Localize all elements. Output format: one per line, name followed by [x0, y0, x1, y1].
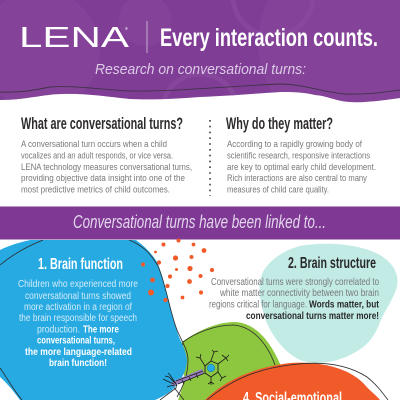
panel: why do they matter: [226, 114, 376, 196]
body text: vocalizes and an adult responds, or vice versa.: [21, 150, 173, 162]
logo: LENA: ®: [125, 26, 128, 31]
body text: most predictive metrics of child outcomes.: [21, 184, 170, 196]
blob: orange panel: [205, 363, 388, 400]
section band: [0, 206, 400, 240]
heading: 1. Brain function: [38, 256, 123, 273]
orange dots: [141, 238, 214, 302]
heading: What are conversational turns?: [21, 114, 183, 133]
body text: According to a rapidly growing body of: [227, 139, 362, 150]
bold takeaway: brain function!: [49, 358, 107, 369]
panel: what are conversational turns: [21, 114, 192, 196]
wavy line: [0, 84, 400, 94]
blob: brain structure background: [260, 244, 397, 363]
body: more activation in a region of: [24, 302, 132, 313]
heading: Why do they matter?: [226, 114, 333, 133]
body: [209, 277, 379, 310]
body text: Rich interactions are also central to many: [227, 173, 367, 184]
body text: A conversational turn occurs when a child: [21, 139, 167, 150]
body: the brain responsible for speech: [19, 313, 137, 324]
bold takeaway: Words matter, but: [309, 300, 380, 310]
body text: [227, 139, 376, 196]
bold takeaway: [25, 324, 132, 369]
body: regions critical for language.: [209, 300, 307, 310]
logo: LENA: [19, 22, 130, 54]
blob: brain function background: [0, 238, 188, 400]
icon: neuron: [163, 350, 229, 387]
body text: LENA technology measures conversational turns,: [21, 162, 192, 173]
body text: measures of child care quality.: [227, 184, 329, 196]
text: brain structure: [209, 255, 380, 322]
bold takeaway: conversational turns,: [37, 336, 115, 346]
logo divider: [146, 21, 148, 53]
body: conversational turns showed: [25, 291, 131, 302]
body: [18, 279, 138, 336]
body: Children who experienced more: [18, 279, 138, 290]
body text: [21, 139, 192, 196]
logo: LENA: LENA: [19, 22, 130, 54]
bold takeaway: The more: [83, 324, 119, 336]
body: production.: [37, 324, 80, 336]
text: brain function: [18, 256, 138, 369]
dotted divider: [209, 120, 211, 196]
bold takeaway: the more language-related: [25, 347, 132, 358]
header banner: [0, 0, 400, 102]
bold takeaway: [246, 300, 380, 322]
subtitle: Research on conversational turns:: [95, 61, 306, 78]
blob: green panel: [160, 322, 281, 400]
body text: providing objective data insight into one of the: [21, 173, 185, 184]
